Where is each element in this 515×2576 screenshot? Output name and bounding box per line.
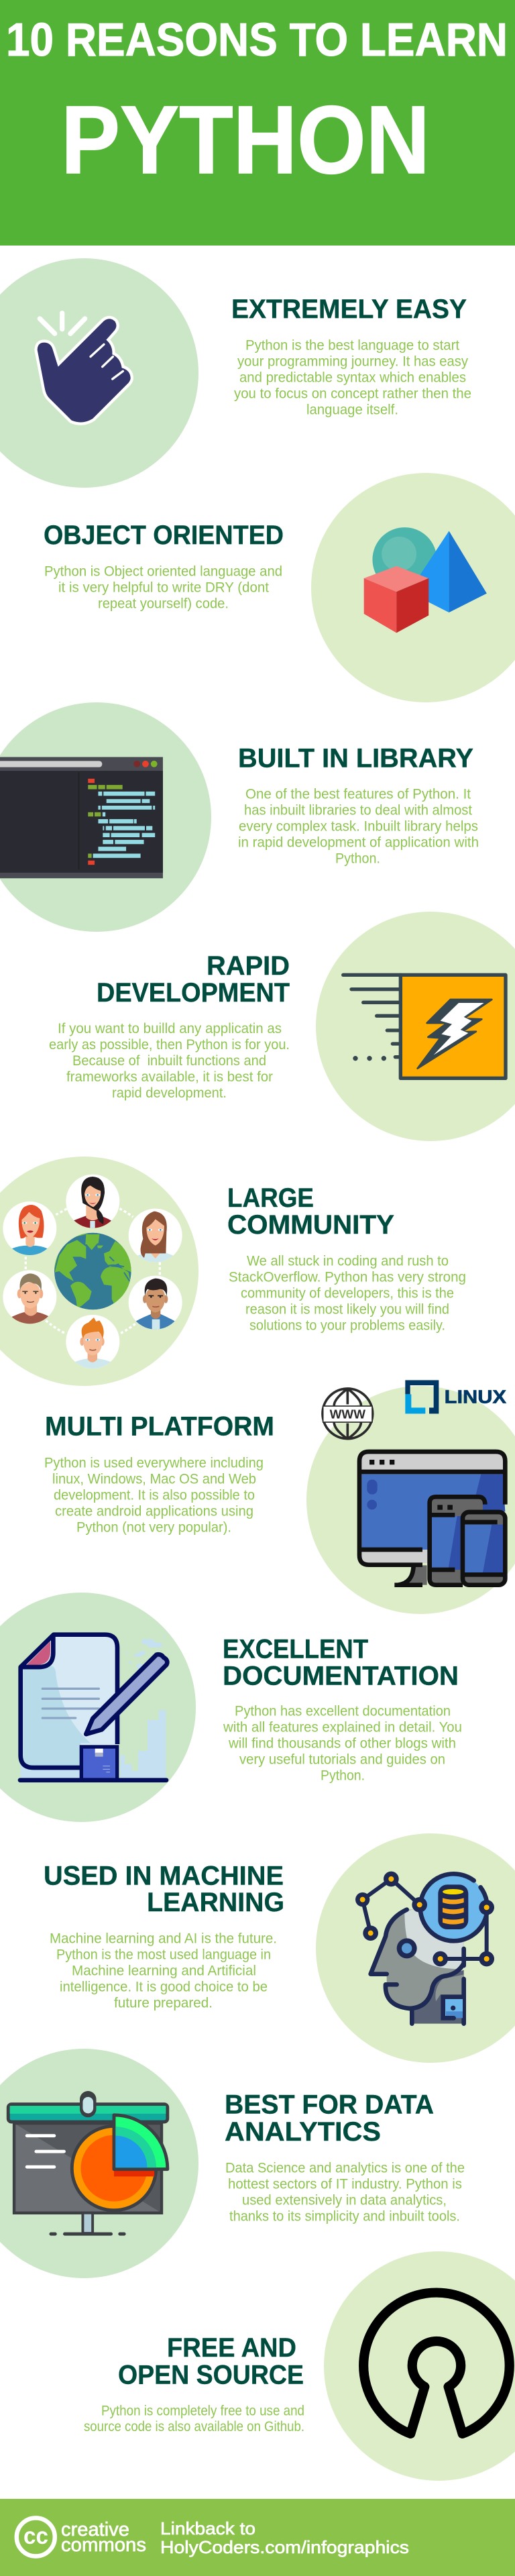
- heading: [223, 1634, 459, 1691]
- heading: EXCELLENT: [223, 1634, 368, 1664]
- panel: large community: [0, 1157, 466, 1386]
- body text: [223, 1704, 462, 1784]
- body text: has inbuilt libraries to deal with almost: [244, 803, 472, 818]
- body text: Machine learning and AI is the future.: [50, 1931, 277, 1947]
- body text: your programming journey. It has easy: [237, 354, 468, 370]
- body text: and predictable syntax which enables: [239, 370, 466, 386]
- icon: code editor window: [0, 757, 163, 878]
- icon: creative commons logo: [17, 2518, 146, 2556]
- icon: creative commons logo: cc: [23, 2523, 48, 2549]
- body text: [44, 564, 282, 612]
- icon: linux logo: [405, 1380, 507, 1413]
- body text: used extensively in data analytics,: [242, 2192, 447, 2208]
- body text: repeat yourself) code.: [98, 596, 229, 612]
- icon: phone: [463, 1512, 505, 1585]
- body text: Because of inbuilt functions and: [72, 1053, 266, 1069]
- body text: Python is the best language to start: [245, 338, 459, 354]
- panel: multi platform: [44, 1380, 515, 1614]
- person: dark haired woman: [72, 1177, 112, 1230]
- panel: excellent documentation: [0, 1593, 462, 1822]
- body text: Python has excellent documentation: [235, 1704, 451, 1719]
- person: dark haired man: [135, 1279, 176, 1330]
- icon: tablet: [430, 1497, 485, 1585]
- body text: [84, 2403, 304, 2434]
- heading: [44, 1861, 284, 1917]
- heading: MULTI PLATFORM: [45, 1411, 274, 1441]
- panel: object oriented: [44, 473, 515, 702]
- body text: Python is used everywhere including: [44, 1455, 264, 1470]
- heading: OBJECT ORIENTED: [44, 521, 284, 550]
- body text: [238, 787, 479, 867]
- icon: creative commons logo: commons: [61, 2534, 146, 2556]
- person: red haired woman: [11, 1205, 48, 1256]
- heading: OPEN SOURCE: [118, 2360, 304, 2390]
- heading: [118, 2333, 304, 2390]
- body text: reason it is most likely you will find: [245, 1302, 449, 1318]
- panel: free and open source: [84, 2251, 515, 2481]
- panel: rapid development: [49, 912, 515, 1141]
- body text: hottest sectors of IT industry. Python is: [228, 2176, 462, 2192]
- body text: create android applications using: [55, 1503, 253, 1519]
- heading: BEST FOR DATA: [225, 2090, 434, 2119]
- heading: LEARNING: [147, 1888, 284, 1917]
- body text: Python.: [321, 1768, 365, 1784]
- icon: creative commons logo: creative: [61, 2519, 129, 2540]
- illustration: people around globe: [3, 1175, 182, 1370]
- body text: with all features explained in detail. You: [223, 1720, 462, 1735]
- body text: Data Science and analytics is one of the: [225, 2160, 465, 2176]
- body text: community of developers, this is the: [241, 1286, 454, 1301]
- heading: BUILT IN LIBRARY: [238, 744, 473, 773]
- icon: monitor: [359, 1452, 505, 1585]
- body text: [49, 1021, 290, 1101]
- body text: [234, 338, 471, 418]
- body text: early as possible, then Python is for you.: [49, 1037, 290, 1053]
- heading: RAPID: [207, 951, 290, 981]
- heading: LARGE: [227, 1183, 314, 1213]
- body text: intelligence. It is good choice to be: [60, 1980, 268, 1995]
- person: orange haired man: [75, 1318, 111, 1370]
- body text: Python.: [335, 851, 380, 867]
- icon: document and pen: [20, 1635, 167, 1780]
- heading: USED IN MACHINE: [44, 1861, 284, 1890]
- body text: it is very helpful to write DRY (dont: [58, 580, 269, 596]
- heading: [227, 1183, 394, 1240]
- body text: you to focus on concept rather then the: [234, 386, 471, 402]
- body text: will find thousands of other blogs with: [228, 1736, 456, 1752]
- panel: built in library: [0, 702, 479, 932]
- body text: thanks to its simplicity and inbuilt tools.: [229, 2208, 460, 2224]
- title: python: PYTHON: [61, 86, 430, 194]
- body text: development. It is also possible to: [54, 1487, 255, 1503]
- panel: used in machine learning: [44, 1833, 515, 2063]
- person: sandy haired man: [11, 1273, 49, 1326]
- heading: [97, 951, 290, 1008]
- heading: [225, 2090, 434, 2147]
- body text: Python is the most used language in: [56, 1947, 271, 1963]
- icon: 3d shapes: [364, 527, 487, 633]
- person: brown haired woman: [137, 1212, 173, 1265]
- body text: We all stuck in coding and rush to: [247, 1254, 449, 1269]
- globe: [52, 1232, 132, 1309]
- body text: frameworks available, it is best for: [66, 1069, 273, 1085]
- body text: [225, 2160, 465, 2224]
- body text: Python is completely free to use and: [101, 2403, 304, 2419]
- panel: best for data analytics: [0, 2049, 465, 2278]
- body text: [44, 1455, 264, 1535]
- icon: lightning speed box: [343, 975, 506, 1078]
- panel: footer: [0, 2499, 515, 2576]
- body text: rapid development.: [112, 1085, 227, 1101]
- linkback text: HolyCoders.com/infographics: [160, 2537, 409, 2557]
- body text: very useful tutorials and guides on: [239, 1752, 445, 1768]
- icon: devices and logos: [323, 1380, 507, 1585]
- heading: DEVELOPMENT: [97, 978, 290, 1008]
- icon: open source logo: [363, 2293, 510, 2434]
- body text: Python (not very popular).: [76, 1519, 231, 1535]
- body text: StackOverflow. Python has very strong: [229, 1270, 466, 1285]
- body text: language itself.: [306, 402, 398, 418]
- linkback text: [160, 2518, 409, 2557]
- body text: One of the best features of Python. It: [245, 787, 471, 802]
- panel: header: [0, 0, 515, 246]
- body text: Python is Object oriented language and: [44, 564, 282, 580]
- icon: www globe: [323, 1389, 373, 1439]
- heading: DOCUMENTATION: [223, 1662, 459, 1691]
- icon: linux logo: LINUX: [445, 1387, 507, 1407]
- body text: [229, 1254, 466, 1334]
- body text: every complex task. Inbuilt library helps: [239, 819, 478, 835]
- body text: in rapid development of application with: [238, 835, 479, 851]
- icon: www globe: WWW: [330, 1407, 365, 1421]
- body text: If you want to builld any applicatin as: [58, 1021, 282, 1036]
- heading: COMMUNITY: [227, 1210, 394, 1240]
- icon: presentation board with pie chart: [8, 2091, 168, 2234]
- icon: ai head with database: [355, 1872, 494, 2024]
- body text: future prepared.: [114, 1996, 213, 2011]
- body text: linux, Windows, Mac OS and Web: [52, 1471, 256, 1487]
- heading: ANALYTICS: [225, 2117, 381, 2147]
- body text: source code is also available on Github.: [84, 2419, 304, 2434]
- body text: Machine learning and Artificial: [72, 1964, 256, 1979]
- linkback text: Linkback to: [160, 2518, 255, 2538]
- body text: solutions to your problems easily.: [249, 1318, 445, 1334]
- heading: EXTREMELY EASY: [231, 294, 467, 324]
- heading: FREE AND: [167, 2333, 296, 2363]
- panel: extremely easy: [0, 258, 471, 488]
- icon: tapping hand: [38, 313, 131, 422]
- body text: [50, 1931, 277, 2011]
